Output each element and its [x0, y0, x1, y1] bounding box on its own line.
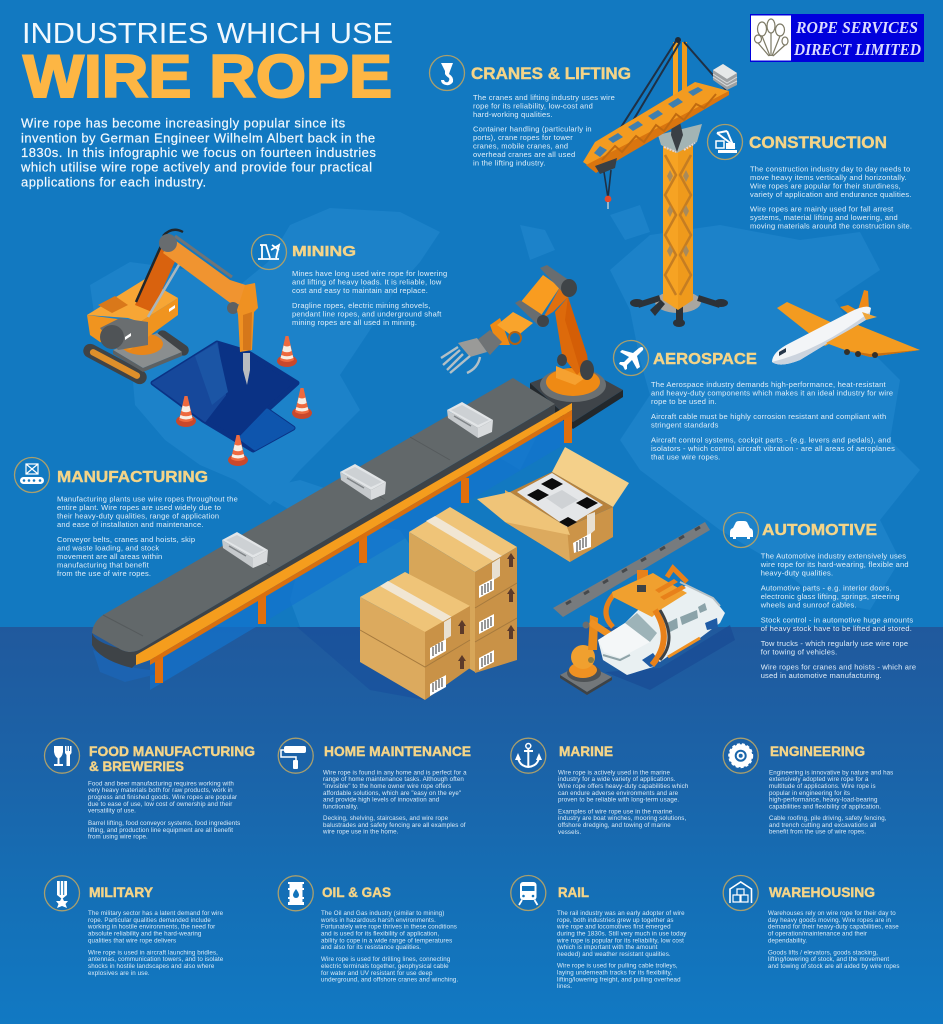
- body text: used in automotive manufacturing.: [761, 671, 882, 680]
- panel: home maintenance: [278, 738, 471, 836]
- intro text: applications for each industry.: [21, 174, 207, 189]
- panel: manufacturing: [14, 458, 238, 578]
- body text: Wire ropes are mainly used for fall arrest: [750, 205, 894, 214]
- body text: electronic glass lifting, springs, steering: [761, 592, 900, 601]
- body text: industry are boat winches, mooring solutions,: [558, 815, 686, 822]
- heading: OIL & GAS: [322, 885, 391, 900]
- logo: [750, 14, 924, 62]
- body text: Cable roofing, pile driving, safety fencing,: [769, 815, 887, 822]
- intro text: invention by German Engineer Wilhelm Albert back in the: [21, 130, 376, 145]
- body text: The Automotive industry extensively uses: [761, 551, 906, 560]
- body text: The rail industry was an early adopter of wire: [557, 910, 685, 917]
- body text: Examples of wire rope use in the marine: [558, 808, 673, 815]
- body text: Warehouses rely on wire rope for their day to: [768, 910, 896, 917]
- body text: their heavy-duty qualities, range of application: [57, 511, 219, 520]
- body text: rope. Particular qualities demanded include: [88, 917, 211, 924]
- body text: from the use of wire ropes.: [57, 569, 151, 578]
- ground band: [0, 627, 943, 1024]
- body text: Wire rope is actively used in the marine: [558, 769, 670, 776]
- body text: during the 1830s. Still very much in use today: [557, 930, 687, 937]
- illustration: car on assembly rail: [553, 522, 735, 695]
- heading: CRANES & LIFTING: [471, 65, 631, 83]
- body text: The Oil and Gas industry (similar to mining): [321, 910, 444, 917]
- body text: benefit from the use of wire ropes.: [769, 829, 866, 836]
- illustration: cardboard box stacks: [360, 507, 517, 700]
- body text: Decking, shelving, staircases, and wire rope: [323, 815, 449, 822]
- body text: and is used for its flexibility of application,: [321, 930, 439, 937]
- body text: variety of application and endurance qualities.: [750, 190, 912, 199]
- body text: Engineering is innovative by nature and has: [769, 769, 893, 776]
- body text: popular in engineering for its: [769, 790, 850, 797]
- panel: automotive: [724, 512, 916, 680]
- body text: movement are all areas within: [57, 552, 162, 561]
- title: INDUSTRIES WHICH USE: [22, 18, 393, 50]
- body text: of operation/maintenance and their: [768, 930, 867, 937]
- icon: medal: [44, 876, 80, 911]
- body text: can endure adverse environments and are: [558, 790, 679, 797]
- body text: multitude of applications. Wire rope is: [769, 783, 876, 790]
- body text: proven to be reliable with long-term usage.: [558, 797, 679, 804]
- body text: electric terminals together, geophysical cable: [321, 963, 449, 970]
- body text: wire rope and locomotives first emerged: [556, 924, 671, 931]
- body text: heavy-duty qualities.: [761, 568, 833, 577]
- icon: plane: [614, 340, 648, 376]
- panel: construction: [708, 124, 912, 231]
- body text: working in hostile environments, the need for: [87, 924, 215, 931]
- panel: cranes & lifting: [430, 56, 631, 168]
- body text: manufacturing that benefit: [57, 560, 150, 569]
- body text: Stock control - in automotive huge amounts: [761, 616, 913, 625]
- icon: paint roller: [278, 738, 313, 773]
- body text: dependability.: [768, 937, 807, 944]
- body text: extensively adopted wire rope for a: [769, 776, 869, 783]
- body text: cranes, mobile cranes, and: [473, 142, 568, 151]
- icon: gear: [723, 738, 758, 773]
- heading: MANUFACTURING: [57, 469, 208, 486]
- heading: AUTOMOTIVE: [762, 522, 877, 539]
- body text: antennas, communication towers, and to isolate: [88, 956, 224, 963]
- body text: vessels.: [558, 829, 581, 836]
- panel: military: [44, 876, 224, 977]
- body text: and provide high levels of innovation and: [323, 797, 440, 804]
- heading: [89, 744, 255, 774]
- body text: explosives are in use.: [88, 970, 150, 977]
- icon: mining rig: [252, 234, 286, 270]
- heading: HOME MAINTENANCE: [324, 744, 471, 759]
- heading: AEROSPACE: [653, 351, 757, 368]
- body text: Goods lifts / elevators, goods stacking,: [768, 949, 878, 956]
- intro text: which utilise wire rope actively and provide four practical: [20, 160, 372, 175]
- logo: DIRECT LIMITED: [793, 40, 921, 59]
- body text: affordable solutions, which are "easy on the eye": [323, 790, 461, 797]
- body text: The military sector has a latent demand for wire: [88, 910, 224, 917]
- body text: industry for a wide variety of applications.: [558, 776, 676, 783]
- body text: Wire ropes are popular for their sturdiness,: [750, 182, 901, 191]
- body text: Container handling (particularly in: [473, 125, 592, 134]
- body text: entire plant. Wire ropes are used widely due to: [57, 503, 221, 512]
- body text: and heavy-duty components which makes it an ideal industry for wire: [651, 388, 893, 398]
- body text: ports), crane ropes for tower: [473, 133, 573, 142]
- body text: shocks in hostile landscapes and also where: [88, 963, 215, 970]
- illustration: tower crane: [583, 37, 737, 327]
- body text: very heavy materials both for raw products, work in: [88, 787, 233, 794]
- icon: warehouse: [723, 876, 758, 910]
- panel: marine: [511, 738, 689, 836]
- body text: wire rope is popular for its reliability, low cost: [556, 937, 684, 944]
- world map backdrop: [90, 205, 920, 627]
- body text: Food and beer manufacturing requires working with: [88, 780, 234, 787]
- body text: and also for its resistance qualities.: [321, 944, 421, 951]
- icon: anchor: [511, 738, 546, 773]
- panel: mining: [252, 234, 447, 327]
- body text: Mines have long used wire rope for lowering: [292, 269, 447, 278]
- body text: move heavy items vertically and horizontally.: [750, 173, 907, 182]
- panel: rail: [511, 876, 687, 990]
- body text: systems, material lifting and lowering, and: [750, 213, 898, 222]
- body text: and ease of installation and maintenance.: [57, 520, 204, 529]
- body text: works in hazardous harsh environments.: [320, 917, 436, 924]
- body text: Automotive parts - e.g. interior doors,: [761, 584, 892, 593]
- logo: ROPE SERVICES: [795, 18, 918, 37]
- body text: lines.: [557, 983, 572, 990]
- icon: excavator: [708, 124, 742, 160]
- panel: warehousing: [723, 876, 900, 970]
- body text: functionality.: [323, 803, 359, 810]
- heading: RAIL: [558, 885, 589, 900]
- body text: mining ropes are all used in mining.: [292, 318, 417, 327]
- body text: "invisible" to the home owner wire rope offers: [323, 783, 451, 790]
- body text: offshore dredging, and towing of marine: [558, 822, 671, 829]
- body text: rope to be used in.: [651, 397, 717, 406]
- body text: Conveyor belts, cranes and hoists, skip: [57, 535, 195, 544]
- heading: FOOD MANUFACTURING: [89, 744, 255, 759]
- body text: progress and finished goods. Wire ropes are popular: [88, 794, 237, 801]
- body text: rope, both industries grew up together as: [557, 917, 674, 924]
- body text: for water and UV resistant for use deep: [321, 970, 433, 977]
- body text: demand for their heavy-duty capabilities, ease: [768, 924, 899, 931]
- background wall: [0, 0, 943, 627]
- body text: Barrel lifting, food conveyor systems, food ingredients: [88, 820, 240, 827]
- icon: car: [724, 512, 758, 548]
- body text: Wire ropes for cranes and hoists - which are: [761, 662, 916, 671]
- body text: Aircraft cable must be highly corrosion resistant and compliant with: [651, 412, 886, 421]
- panel: engineering: [723, 738, 893, 836]
- heading: CONSTRUCTION: [749, 134, 887, 152]
- panel: aerospace: [614, 340, 895, 461]
- body text: (which is important with the amount: [557, 944, 658, 951]
- body text: versatility of use.: [88, 808, 136, 815]
- illustration: mining pit and excavator: [81, 230, 312, 466]
- icon: conveyor and crate: [14, 458, 50, 492]
- body text: due to ease of use, low cost of ownership and their: [88, 801, 232, 808]
- body text: lifting, and production line equipment are all benefit: [88, 827, 233, 834]
- heading: & BREWERIES: [89, 759, 184, 774]
- icon: crane hook: [430, 56, 464, 90]
- body text: balustrades and safety fencing are all examples of: [323, 822, 466, 829]
- body text: The cranes and lifting industry uses wire: [473, 93, 615, 102]
- body text: rope for its reliability, low-cost and: [473, 102, 593, 110]
- body text: and trench cutting and excavations all: [769, 822, 876, 829]
- body text: wire rope use in the home.: [322, 829, 399, 836]
- body text: Wire rope is used in aircraft launching bridles,: [88, 949, 218, 956]
- icon: glass and fork: [44, 738, 80, 773]
- body text: Wire rope is used for drilling lines, connecting: [321, 956, 451, 963]
- body text: qualities that wire rope delivers: [88, 937, 176, 944]
- body text: lifting/lowering freight, and pulling overhead: [557, 976, 681, 983]
- body text: from using wire rope.: [88, 834, 148, 841]
- panel: food manufacturing & breweries: [44, 738, 255, 841]
- body text: capabilities and flexibility of application.: [769, 803, 881, 810]
- body text: lifting/lowering of stock, and the movement: [768, 956, 889, 963]
- body text: cost and easy to maintain and replace.: [292, 286, 428, 295]
- body text: range of home maintenance tasks. Although often: [323, 776, 464, 783]
- body text: laying underneath tracks for its flexibility,: [557, 970, 672, 977]
- title: WIRE ROPE: [23, 43, 392, 110]
- body text: and towing of stock are all aided by wire ropes: [768, 963, 900, 970]
- body text: overhead cranes are all used: [473, 150, 575, 159]
- body text: Wire rope offers heavy-duty capabilities which: [558, 783, 689, 790]
- body text: absolute reliability and the hard-wearing: [88, 930, 202, 937]
- body text: The construction industry day to day needs to: [750, 165, 910, 174]
- body text: underground, and offshore cranes and winching.: [321, 977, 458, 984]
- heading: MARINE: [559, 744, 613, 759]
- heading: WAREHOUSING: [769, 885, 875, 900]
- body text: day heavy goods moving. Wire ropes are in: [768, 917, 892, 924]
- body text: and waste loading, and stock: [57, 543, 159, 552]
- body text: Wire rope is used for pulling cable trolleys,: [557, 963, 678, 970]
- title: [22, 18, 393, 110]
- heading: MINING: [292, 243, 356, 260]
- body text: Dragline ropes, electric mining shovels,: [292, 301, 430, 310]
- heading: MILITARY: [89, 885, 153, 900]
- body text: Fortunately wire rope thrives in these conditions: [321, 924, 457, 931]
- intro text: 1830s. In this infographic we focus on fourteen industries: [21, 145, 376, 160]
- body text: that use wire ropes.: [651, 452, 720, 461]
- body text: of heavy stock have to be lifted and stored.: [761, 624, 912, 633]
- body text: needed) and weather resistant qualities.: [557, 951, 671, 958]
- conveyor floor shadow: [150, 412, 572, 690]
- body text: stringent standards: [651, 420, 719, 430]
- body text: pendant line ropes, and underground shaft: [292, 310, 442, 318]
- body text: for towing of vehicles.: [761, 648, 837, 656]
- body text: Wire rope is found in any home and is perfect for a: [323, 769, 467, 776]
- body text: and lifting of heavy loads. It is reliable, low: [292, 278, 442, 286]
- illustration: airplane: [772, 290, 920, 365]
- illustration: conveyor with robot arm: [92, 265, 623, 683]
- panel: oil & gas: [278, 876, 458, 984]
- body text: wheels and sunroof cables.: [760, 601, 857, 610]
- intro text: Wire rope has become increasingly popular since its: [21, 116, 346, 131]
- illustration: open box with parts: [477, 447, 629, 562]
- floor shadow: [297, 627, 425, 700]
- body text: Manufacturing plants use wire ropes throughout the: [57, 494, 238, 503]
- body text: isolators - which control aircraft vibration - are all areas of aeroplanes: [651, 444, 895, 453]
- body text: wire rope for its hard-wearing, flexible and: [760, 560, 909, 569]
- body text: high-performance, heavy-load-bearing: [769, 797, 878, 804]
- heading: ENGINEERING: [770, 744, 865, 759]
- body text: in the lifting industry.: [473, 159, 546, 168]
- body text: hard-working qualities.: [473, 110, 553, 119]
- tray boxes on conveyor: [222, 402, 493, 568]
- body text: moving materials around the construction site.: [750, 222, 912, 231]
- body text: The Aerospace industry demands high-performance, heat-resistant: [651, 380, 887, 389]
- icon: train: [511, 876, 546, 910]
- body text: Tow trucks - which regularly use wire rope: [761, 639, 908, 648]
- body text: Aircraft control systems, cockpit parts - (e.g. levers and pedals), and: [651, 435, 891, 444]
- body text: ability to cope in a wide range of temperatures: [321, 937, 452, 944]
- conveyor end shadow: [93, 650, 165, 682]
- icon: oil barrel: [278, 876, 313, 911]
